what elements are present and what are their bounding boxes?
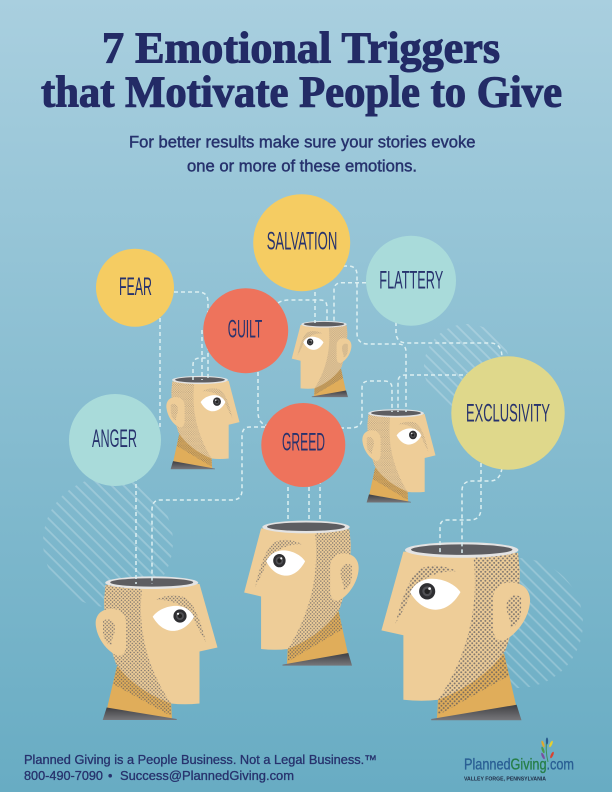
circle: greed <box>261 403 345 487</box>
circle: anger: ANGER <box>92 425 137 453</box>
hatched circle: lower left <box>43 477 173 607</box>
hatched circle: upper right <box>424 324 510 410</box>
head: small top <box>292 321 351 397</box>
head: large centre <box>244 521 359 666</box>
circle: salvation <box>253 194 350 291</box>
circle: flattery <box>366 236 456 326</box>
hatched circle: lower right <box>453 558 583 688</box>
logo: PlannedGiving.com <box>464 757 574 774</box>
footer text: Success@PlannedGiving.com <box>120 769 294 783</box>
circle: greed: GREED <box>282 429 325 457</box>
title <box>41 24 562 116</box>
footer text: Planned Giving is a People Business. Not a Legal Business.™ <box>24 753 377 767</box>
subtitle: For better results make sure your stories evoke <box>129 134 476 152</box>
circle: flattery: FLATTERY <box>379 266 443 294</box>
footer text: 800-490-7090 <box>24 769 103 783</box>
logo <box>464 738 574 783</box>
footer text: • <box>108 769 112 783</box>
subtitle <box>129 134 476 176</box>
head: small right <box>362 409 435 503</box>
title: 7 Emotional Triggers <box>102 24 500 72</box>
circle: salvation: SALVATION <box>267 227 337 255</box>
dashed connector lines <box>136 266 502 584</box>
circle: exclusivity <box>451 356 565 470</box>
title: that Motivate People to Give <box>41 68 562 116</box>
logo: VALLEY FORGE, PENNSYLVANIA <box>464 777 546 783</box>
circle: anger <box>69 394 161 486</box>
subtitle: one or more of these emotions. <box>187 158 417 176</box>
circle: guilt <box>203 288 288 373</box>
head: large left <box>96 576 218 720</box>
circle: guilt: GUILT <box>228 316 262 344</box>
circle: fear <box>96 249 174 327</box>
circle: fear: FEAR <box>119 273 152 301</box>
head: small left <box>166 376 239 469</box>
head: large right <box>381 542 530 720</box>
footer text <box>24 753 377 783</box>
